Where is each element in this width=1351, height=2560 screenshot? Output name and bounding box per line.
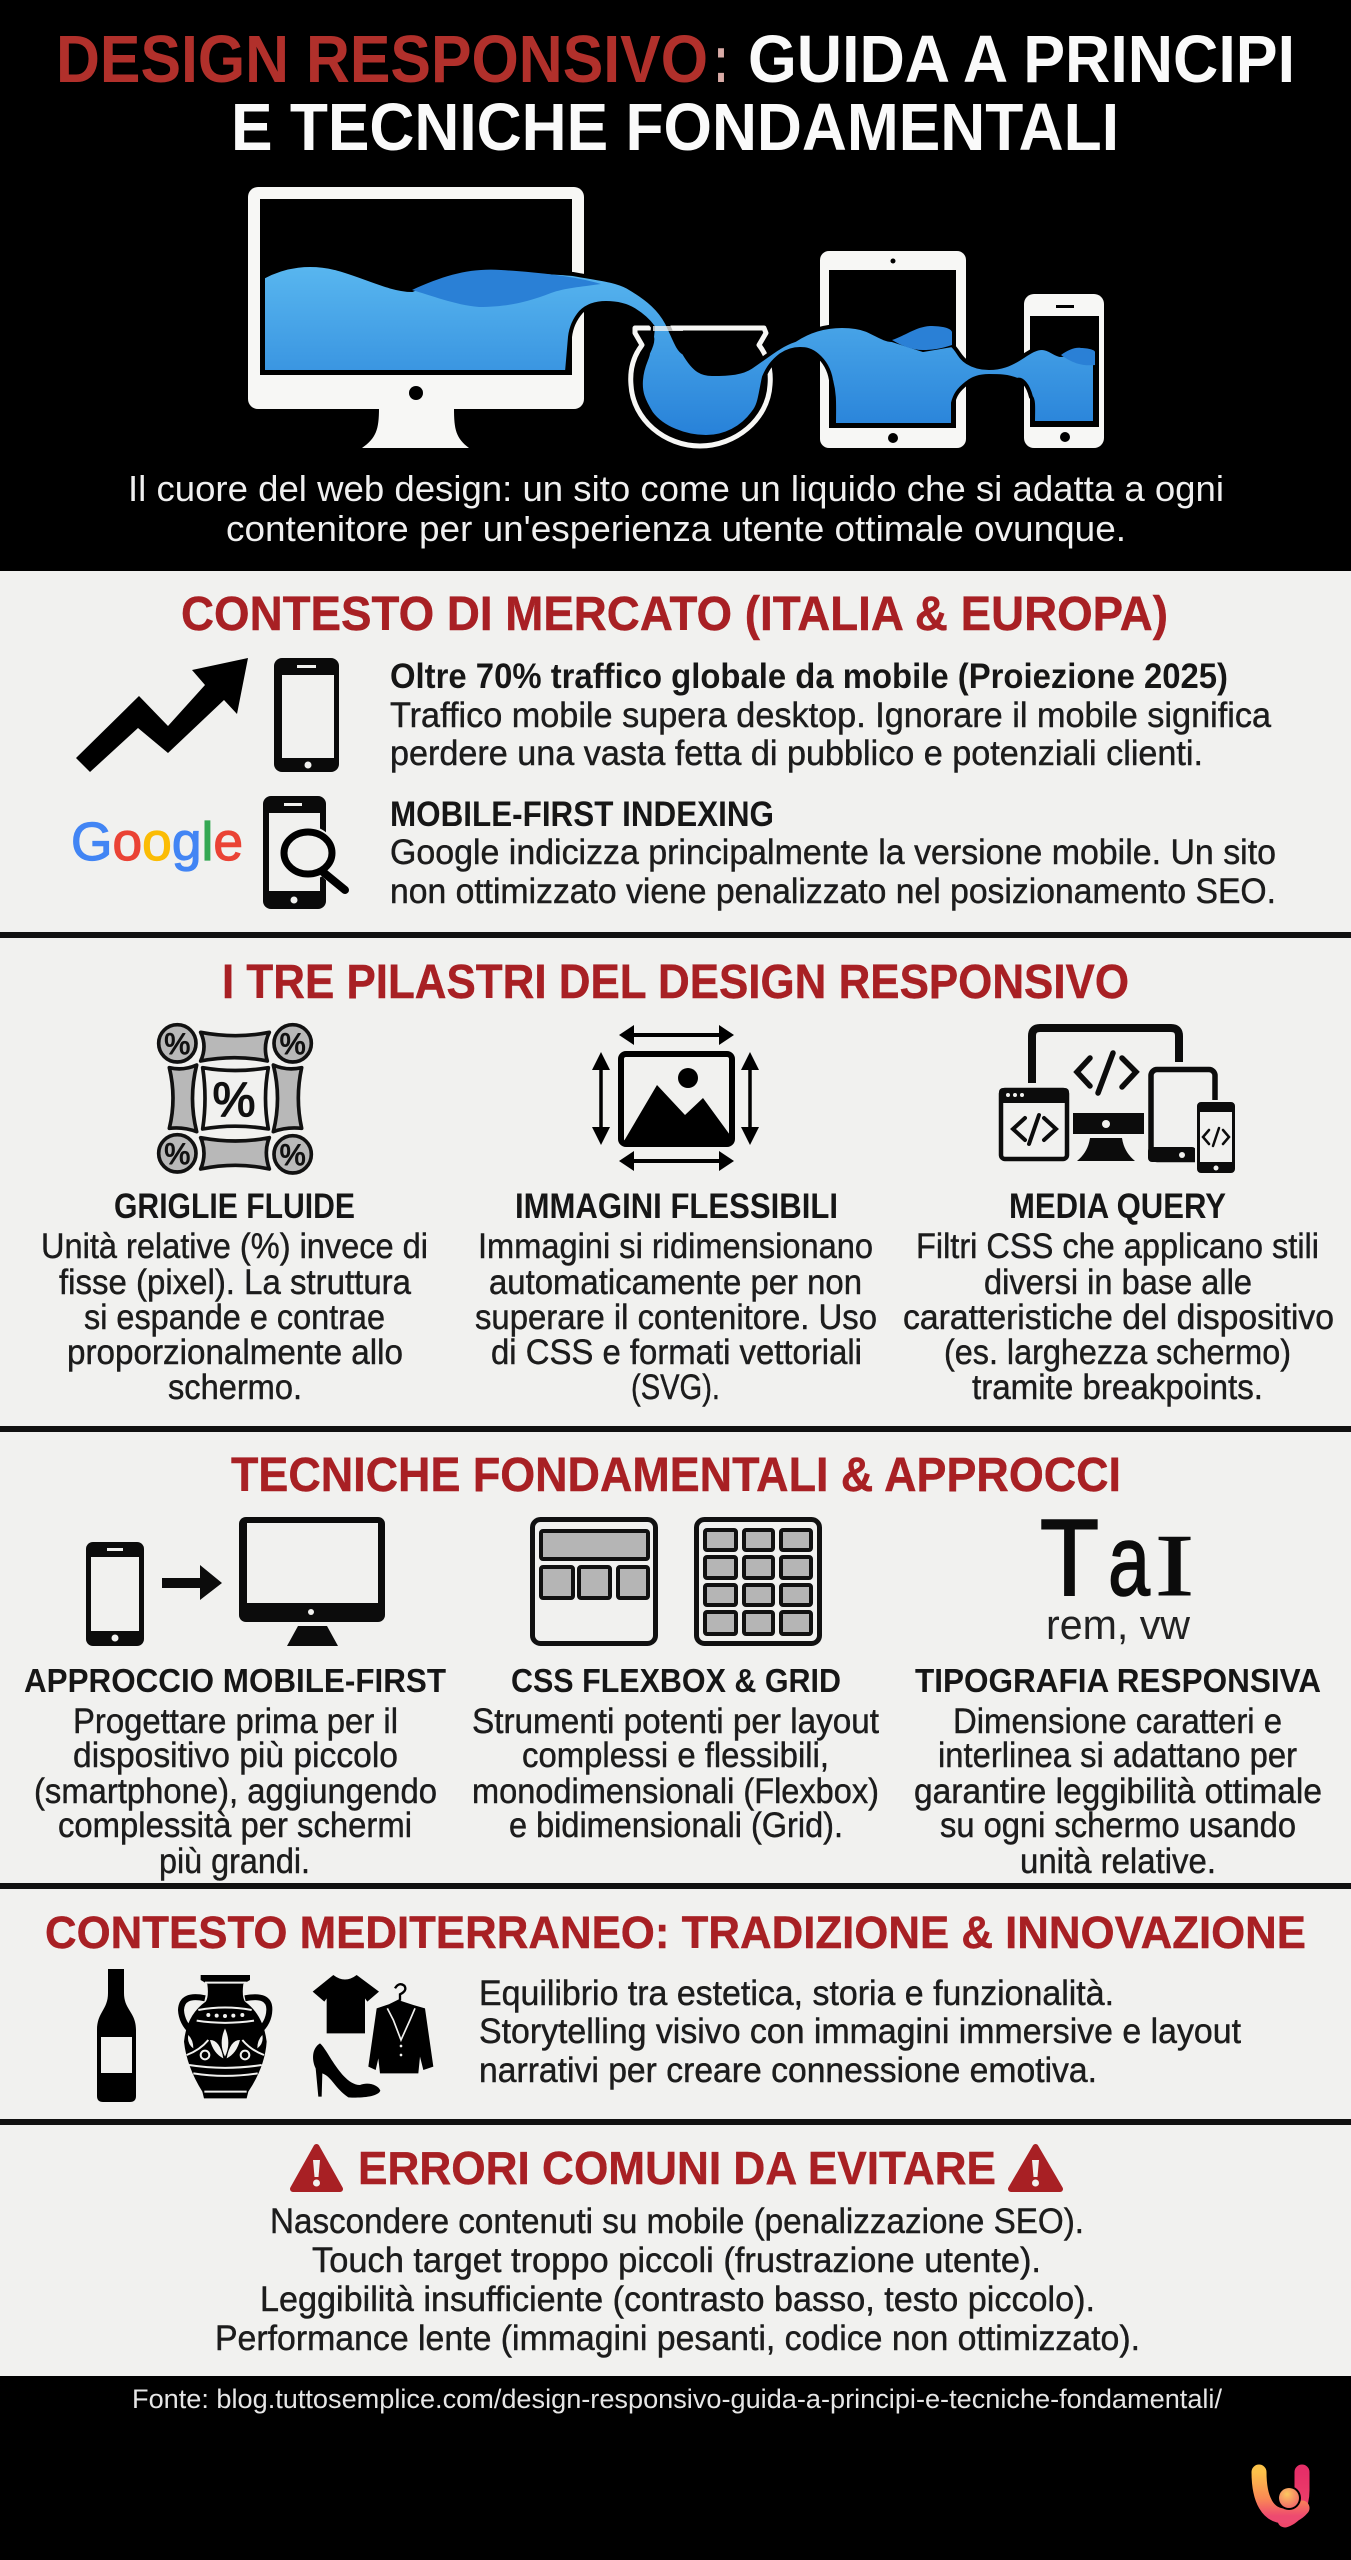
column: tipografia responsiva: interlinea si adattano per: [938, 1736, 1297, 1775]
text: errors list: Touch target troppo piccoli (frustrazione utente).: [312, 2241, 1041, 2280]
column: tipografia responsiva: unità relative.: [1020, 1842, 1216, 1881]
icon: google logo: Google: [71, 812, 243, 872]
column: css flexbox e grid: CSS FLEXBOX & GRID: [511, 1662, 841, 1699]
illustration: liquid flowing through devices: [248, 187, 1104, 448]
column: griglie fluide: fisse (pixel). La struttura: [59, 1263, 411, 1302]
intro text: contenitore per un'esperienza utente ottimale ovunque.: [226, 508, 1126, 549]
icon: fashion items: [313, 1975, 433, 2098]
icon: bowl: [631, 328, 770, 446]
text: errors list: Leggibilità insufficiente (contrasto basso, testo piccolo).: [260, 2280, 1095, 2319]
column: media query: tramite breakpoints.: [972, 1368, 1263, 1407]
heading: ERRORI COMUNI DA EVITARE: [358, 2142, 996, 2194]
icon: fluid grid: %: [164, 1138, 190, 1171]
text: errors list: [215, 2202, 1140, 2358]
icon: warning left: [293, 2147, 340, 2189]
text: mobile-first indexing: non ottimizzato viene penalizzato nel posizionamento SEO.: [390, 872, 1276, 911]
icon: fluid grid: %: [280, 1028, 306, 1061]
column: tipografia responsiva: [914, 1662, 1322, 1881]
icon: desktop monitor: [248, 187, 584, 448]
column: approccio mobile-first: APPROCCIO MOBILE-FIRST: [24, 1662, 446, 1699]
icon: responsive type: [1040, 1497, 1194, 1648]
water: dark back wave, tablet: [892, 326, 952, 350]
heading: CONTESTO MEDITERRANEO: TRADIZIONE & INNOVAZIONE: [45, 1907, 1306, 1958]
icon: fluid grid: [159, 1025, 311, 1173]
column: approccio mobile-first: dispositivo più piccolo: [73, 1736, 398, 1775]
water: liquid stream: [263, 265, 1095, 437]
icon: responsive type: T: [1040, 1497, 1099, 1619]
column: css flexbox e grid: e bidimensionali (Grid).: [509, 1806, 843, 1845]
column: immagini flessibili: IMMAGINI FLESSIBILI: [515, 1187, 838, 1226]
icon: logo: [1259, 2472, 1302, 2520]
column: media query: Filtri CSS che applicano stili: [916, 1227, 1319, 1266]
column: css flexbox e grid: Strumenti potenti per layout: [472, 1702, 879, 1741]
text: traffico mobile: Oltre 70% traffico globale da mobile (Proiezione 2025): [390, 657, 1228, 696]
icon: responsive type: rem, vw: [1046, 1601, 1191, 1648]
water: dark back wave, monitor: [412, 270, 601, 307]
panel: errori comuni: [215, 2142, 1140, 2358]
icon: phone with magnifier: [263, 796, 345, 909]
column: immagini flessibili: (SVG).: [631, 1368, 720, 1407]
column: tipografia responsiva: garantire leggibilità ottimale: [914, 1772, 1322, 1811]
water: dark back wave, phone: [1061, 348, 1095, 365]
column: approccio mobile-first: complessità per schermi: [58, 1806, 412, 1845]
title: :: [714, 22, 728, 97]
text: errors list: Performance lente (immagini pesanti, codice non ottimizzato).: [215, 2319, 1140, 2358]
heading: CONTESTO DI MERCATO (ITALIA & EUROPA): [181, 588, 1168, 641]
column: approccio mobile-first: più grandi.: [159, 1842, 310, 1881]
icon: fluid grid: %: [164, 1028, 190, 1061]
title: GUIDA A PRINCIPI: [748, 22, 1295, 97]
column: immagini flessibili: superare il contenitore. Uso: [475, 1298, 877, 1337]
text: mobile-first indexing: [390, 795, 1276, 911]
column: approccio mobile-first: [24, 1662, 446, 1881]
column: css flexbox e grid: monodimensionali (Flexbox): [472, 1772, 879, 1811]
column: immagini flessibili: di CSS e formati vettoriali: [491, 1333, 862, 1372]
column: css flexbox e grid: [472, 1662, 879, 1845]
icon: media query devices: [999, 1028, 1236, 1174]
panel: i tre pilastri: [41, 956, 1334, 1407]
icon: greek amphora: [181, 1975, 269, 2098]
icon: flexible image: [592, 1025, 759, 1171]
icon: wine bottle: [97, 1969, 136, 2102]
icon: warning right: [1011, 2147, 1060, 2189]
text: tradizione e innovazione: [479, 1974, 1241, 2090]
column: media query: caratteristiche del dispositivo: [903, 1298, 1334, 1337]
icon: css grid layout: [696, 1520, 820, 1644]
icon: fluid grid: %: [280, 1139, 306, 1172]
column: griglie fluide: Unità relative (%) invece di: [41, 1227, 428, 1266]
title: [56, 22, 1295, 165]
text: mobile-first indexing: MOBILE-FIRST INDEXING: [390, 795, 774, 834]
title: DESIGN RESPONSIVO: [56, 22, 708, 97]
icon: flexbox layout: [532, 1520, 656, 1644]
icon: responsive type: a: [1108, 1505, 1150, 1617]
icon: mobile to desktop: [86, 1517, 385, 1646]
icon: fluid grid: %: [213, 1073, 255, 1127]
title: E TECNICHE FONDAMENTALI: [231, 90, 1119, 165]
column: griglie fluide: [41, 1187, 428, 1407]
column: griglie fluide: GRIGLIE FLUIDE: [114, 1187, 355, 1226]
icon: rising trend arrow: [76, 658, 248, 772]
panel: light content area: [0, 571, 1351, 2376]
column: approccio mobile-first: (smartphone), aggiungendo: [34, 1772, 437, 1811]
panel: contesto di mercato: [71, 588, 1276, 911]
icon: phone: [1024, 294, 1104, 448]
icon: smartphone: [274, 658, 339, 772]
column: griglie fluide: proporzionalmente allo: [67, 1333, 403, 1372]
column: media query: MEDIA QUERY: [1009, 1187, 1226, 1226]
panel: tecniche fondamentali: [24, 1449, 1322, 1881]
intro text: Il cuore del web design: un sito come un liquido che si adatta a ogni: [128, 468, 1224, 509]
intro text: [128, 468, 1224, 549]
text: traffico mobile: [390, 657, 1272, 773]
column: css flexbox e grid: complessi e flessibili,: [522, 1736, 829, 1775]
text: tradizione e innovazione: narrativi per creare connessione emotiva.: [479, 2051, 1097, 2090]
icon: responsive type: I: [1155, 1518, 1194, 1615]
column: tipografia responsiva: su ogni schermo usando: [940, 1806, 1296, 1845]
icon: tablet: [820, 251, 966, 448]
column: tipografia responsiva: TIPOGRAFIA RESPONSIVA: [915, 1662, 1321, 1699]
column: media query: [903, 1187, 1334, 1407]
column: tipografia responsiva: Dimensione caratteri e: [953, 1702, 1282, 1741]
heading: TECNICHE FONDAMENTALI & APPROCCI: [231, 1449, 1121, 1502]
column: griglie fluide: si espande e contrae: [84, 1298, 385, 1337]
column: immagini flessibili: [475, 1187, 877, 1407]
text: traffico mobile: Traffico mobile supera desktop. Ignorare il mobile significa: [390, 696, 1272, 735]
text: mobile-first indexing: Google indicizza principalmente la versione mobile. Un sito: [390, 833, 1276, 872]
column: immagini flessibili: Immagini si ridimensionano: [478, 1227, 873, 1266]
column: media query: diversi in base alle: [984, 1263, 1252, 1302]
panel: contesto mediterraneo: [45, 1907, 1306, 2102]
text: traffico mobile: perdere una vasta fetta di pubblico e potenziali clienti.: [390, 734, 1203, 773]
text: tradizione e innovazione: Equilibrio tra estetica, storia e funzionalità.: [479, 1974, 1114, 2013]
column: griglie fluide: schermo.: [168, 1368, 302, 1407]
source line: Fonte: blog.tuttosemplice.com/design-responsivo-guida-a-principi-e-tecniche-fondamentali/: [132, 2384, 1222, 2414]
text: tradizione e innovazione: Storytelling visivo con immagini immersive e layout: [479, 2012, 1241, 2051]
column: immagini flessibili: automaticamente per non: [489, 1263, 862, 1302]
heading: I TRE PILASTRI DEL DESIGN RESPONSIVO: [222, 956, 1129, 1009]
column: approccio mobile-first: Progettare prima per il: [73, 1702, 398, 1741]
column: media query: (es. larghezza schermo): [944, 1333, 1291, 1372]
text: errors list: Nascondere contenuti su mobile (penalizzazione SEO).: [270, 2202, 1084, 2241]
